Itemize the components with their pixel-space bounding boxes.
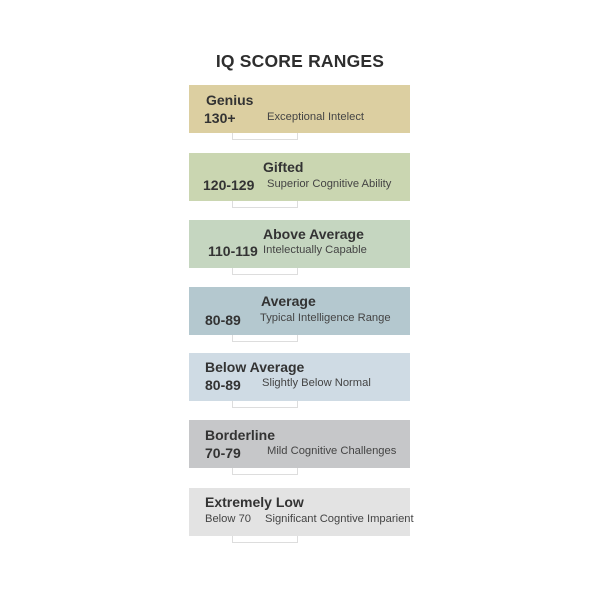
panel: above average: Above Average bbox=[263, 226, 364, 242]
panel: above average bbox=[189, 220, 410, 268]
panel: extremely low: Significant Cogntive Imparient bbox=[265, 513, 414, 525]
panel: gifted bbox=[189, 153, 410, 201]
panel: below average: Below Average bbox=[205, 359, 304, 375]
panel: gifted: Superior Cognitive Ability bbox=[267, 178, 391, 190]
panel: genius bbox=[189, 85, 410, 133]
panel: extremely low: Extremely Low bbox=[205, 494, 304, 510]
panel: gifted: Gifted bbox=[263, 159, 303, 175]
title: IQ SCORE RANGES bbox=[216, 51, 384, 71]
panel: average bbox=[189, 287, 410, 335]
panel: below average: Slightly Below Normal bbox=[262, 377, 371, 389]
panel: below average bbox=[189, 353, 410, 401]
panel: average: Typical Intelligence Range bbox=[260, 312, 391, 324]
panel: above average: Intelectually Capable bbox=[263, 244, 367, 256]
panel: above average: 110-119 bbox=[208, 243, 258, 259]
panel: genius: 130+ bbox=[204, 110, 236, 126]
panel: extremely low: Below 70 bbox=[205, 513, 251, 525]
panel: gifted: 120-129 bbox=[203, 177, 254, 193]
panel: borderline bbox=[189, 420, 410, 468]
panel: borderline: Borderline bbox=[205, 427, 275, 443]
panel: average: 80-89 bbox=[205, 312, 241, 328]
panel: average: Average bbox=[261, 293, 316, 309]
panel: genius: Genius bbox=[206, 92, 253, 108]
panel: genius: Exceptional Intelect bbox=[267, 111, 364, 123]
panel: borderline: 70-79 bbox=[205, 445, 241, 461]
panel: borderline: Mild Cognitive Challenges bbox=[267, 445, 396, 457]
panel: below average: 80-89 bbox=[205, 377, 241, 393]
panel: extremely low bbox=[189, 488, 410, 536]
